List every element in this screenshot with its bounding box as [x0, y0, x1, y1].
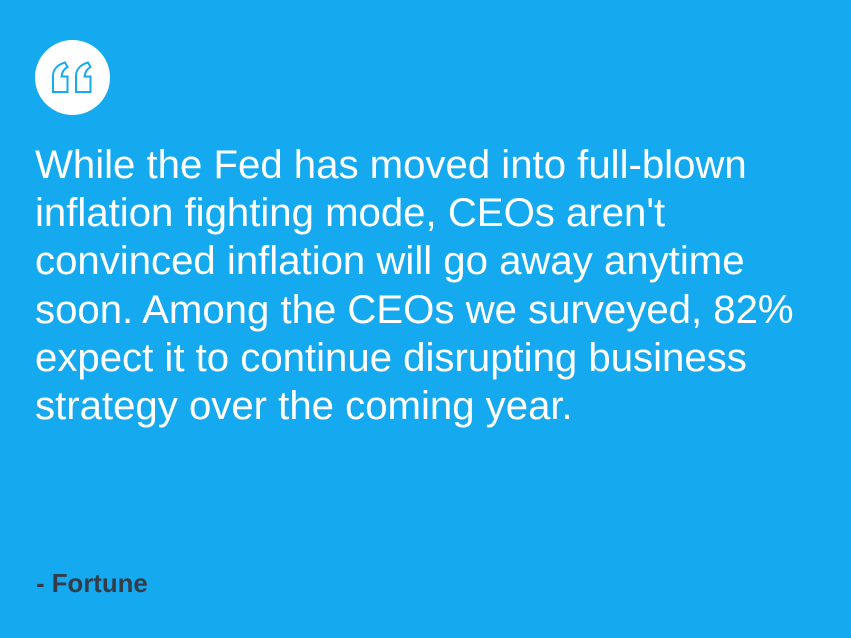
quote text: expect it to continue disrupting business [35, 335, 747, 380]
quote text [35, 142, 794, 428]
source attribution: - Fortune [36, 570, 148, 598]
quote text: While the Fed has moved into full-blown [35, 142, 747, 187]
quote text: inflation fighting mode, CEOs aren't [35, 190, 665, 235]
quote text: strategy over the coming year. [35, 383, 573, 428]
quote text: soon. Among the CEOs we surveyed, 82% [35, 287, 794, 332]
icon: quotation mark in white circle [35, 40, 110, 115]
quote text: convinced inflation will go away anytime [35, 238, 745, 283]
